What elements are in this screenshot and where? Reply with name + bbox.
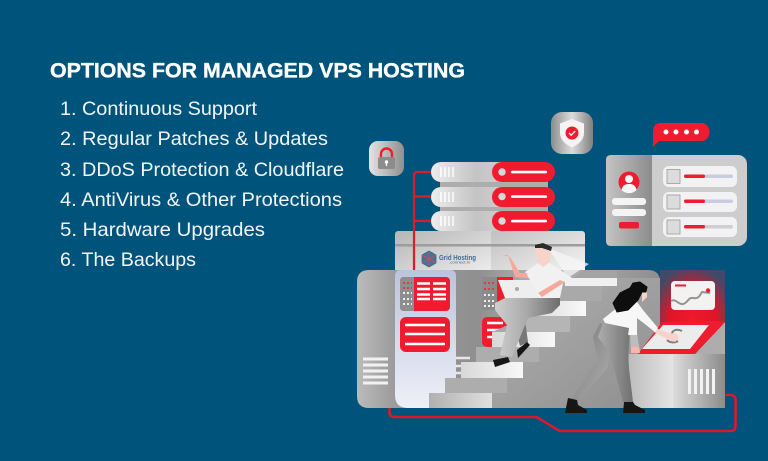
step 1 (429, 393, 492, 408)
step 2 (445, 378, 507, 393)
front leg (495, 298, 560, 357)
hair (535, 243, 552, 251)
face (642, 288, 647, 302)
back panel with logo (395, 231, 585, 275)
man on stairs (493, 243, 589, 367)
main console panel (357, 270, 660, 408)
logo: .connect.in (449, 260, 470, 264)
item 5: 5. Hardware Upgrades (60, 219, 265, 241)
woman at console (565, 282, 679, 413)
item 4: 4. AntiVirus & Other Protections (60, 189, 342, 211)
right arm and hand (654, 328, 679, 342)
laptop (498, 280, 540, 298)
step 3 (461, 362, 523, 378)
control machine (629, 270, 725, 408)
forward arm (538, 280, 565, 297)
step 8 (540, 286, 602, 301)
item 2: 2. Regular Patches & Updates (60, 128, 328, 150)
step 9 (565, 278, 617, 286)
front leg (598, 323, 633, 402)
server rack body (440, 178, 548, 190)
item 3: 3. DDoS Protection & Cloudflare (60, 159, 344, 181)
server row 2 (431, 187, 555, 207)
step 6 (508, 316, 570, 332)
vent bars (690, 369, 714, 394)
card row 2 (663, 192, 737, 212)
shirt (525, 263, 572, 298)
step 10 (573, 270, 617, 278)
staircase (429, 270, 660, 408)
vent lines left (363, 359, 388, 383)
back leg (517, 320, 528, 346)
avatar (618, 172, 640, 192)
profile card (606, 155, 747, 246)
card row 1 (663, 166, 737, 187)
icon: padlock tile (369, 141, 404, 176)
red connector line: bottom (390, 395, 736, 431)
monitor screen (671, 281, 715, 310)
hair (613, 282, 647, 312)
step 4 (476, 347, 539, 362)
touch tablet (638, 321, 725, 354)
speech bubble (653, 123, 710, 147)
sloped side (695, 322, 725, 354)
card row 3 (663, 217, 737, 237)
shoes (493, 357, 510, 367)
profile sidebar (606, 155, 652, 246)
title: OPTIONS FOR MANAGED VPS HOSTING (50, 58, 465, 82)
step 5 (492, 332, 555, 347)
step 7 (524, 301, 586, 316)
front face left (629, 354, 673, 408)
red server block (400, 277, 450, 311)
logo: Grid Hosting (439, 255, 476, 262)
server stack (431, 162, 555, 234)
icon: shield tile (551, 112, 593, 154)
light shard behind shirt (548, 248, 589, 278)
shirt (603, 302, 658, 335)
item 6: 6. The Backups (60, 249, 196, 271)
face (535, 248, 550, 267)
second server unit (456, 277, 513, 373)
server row 3 (431, 211, 555, 231)
server row 1 (431, 162, 555, 182)
left arm (630, 333, 640, 352)
red connector lines: servers (414, 172, 431, 272)
back leg (572, 323, 610, 402)
shoes (565, 398, 587, 413)
raised arm (502, 255, 528, 278)
red menu block (400, 317, 450, 352)
red glow behind screen (660, 270, 725, 354)
front face right (673, 354, 725, 408)
list of hosting options (60, 98, 344, 271)
logo (422, 251, 476, 267)
item 1: 1. Continuous Support (60, 98, 258, 120)
blue door panel (395, 270, 456, 408)
